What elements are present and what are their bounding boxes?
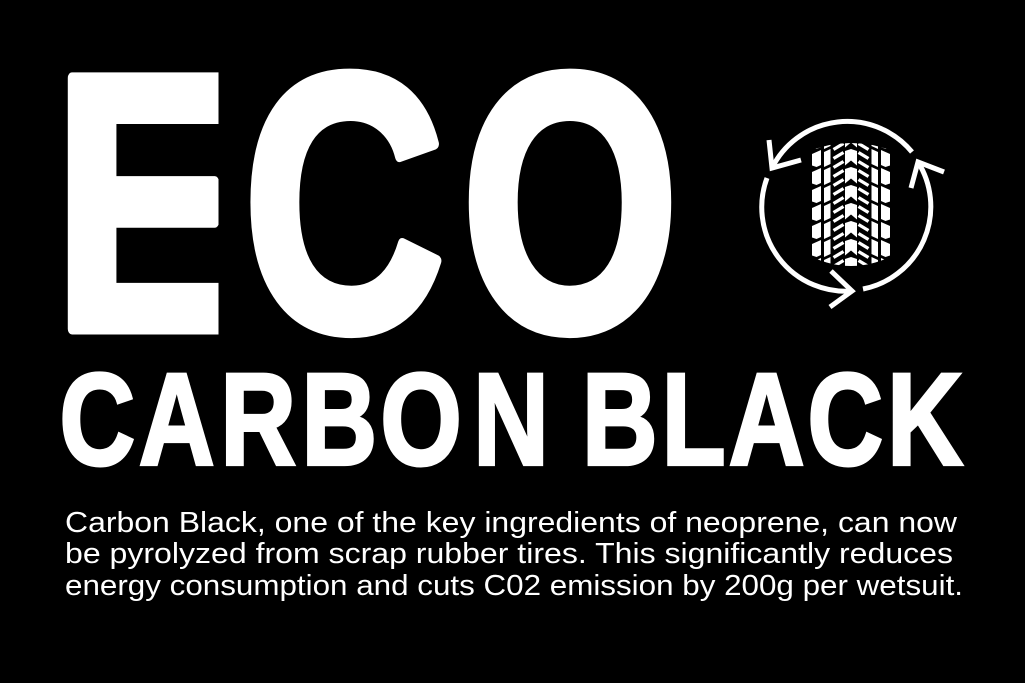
body text: Carbon Black, one of the key ingredients of neoprene, can now	[65, 507, 958, 539]
heading: ECO: ECO	[53, 0, 679, 407]
body text: energy consumption and cuts C02 emission by 200g per wetsuit.	[65, 570, 963, 602]
body text	[65, 507, 963, 602]
body text: be pyrolyzed from scrap rubber tires. This significantly reduces	[65, 538, 953, 570]
heading: CARBON BLACK: CARBON BLACK	[59, 347, 963, 493]
icon: tire tread	[812, 143, 890, 266]
icon: recycling arrows	[762, 121, 944, 307]
icon: recycled tire	[762, 121, 944, 307]
